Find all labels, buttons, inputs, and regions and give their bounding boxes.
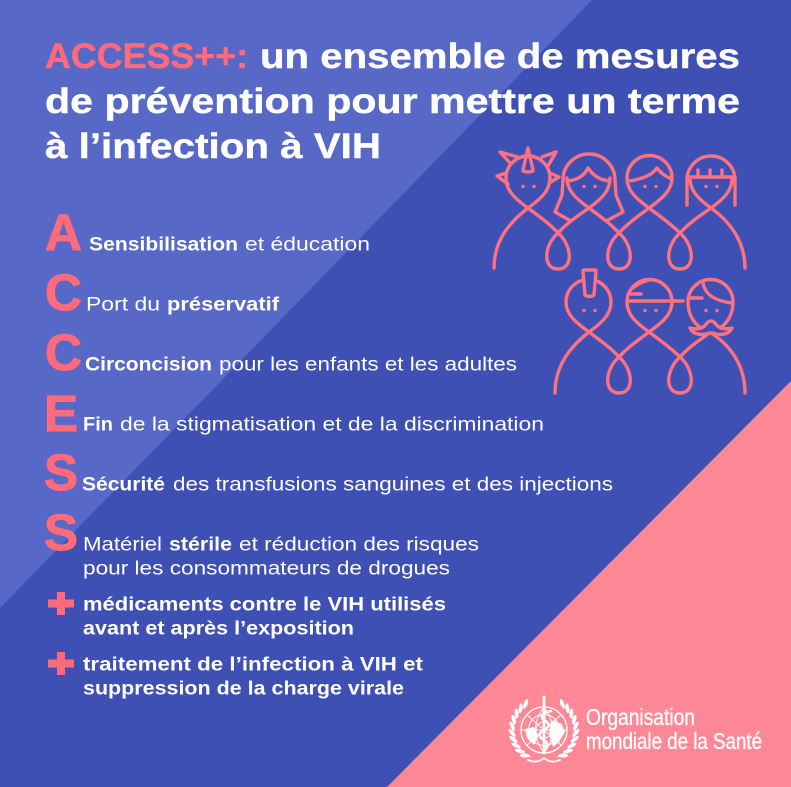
hair: mohawk bbox=[583, 270, 596, 296]
title: ACCESS++: bbox=[45, 37, 248, 76]
illustration: group of people, bottom row bbox=[555, 270, 745, 393]
hair: cap bbox=[627, 280, 683, 301]
list item: plus, medicines: médicaments contre le VIH utilisés bbox=[83, 594, 446, 616]
list item: plus, medicines: avant et après l’exposition bbox=[83, 618, 354, 640]
list item: S: et réduction des risques bbox=[239, 534, 479, 556]
title bbox=[45, 37, 740, 166]
list item: plus, treatment: traitement de l’infection à VIH et bbox=[83, 654, 424, 676]
faces bbox=[582, 309, 719, 312]
list item: S: Sécurité bbox=[82, 474, 165, 496]
list item: S: pour les consommateurs de drogues bbox=[83, 558, 450, 580]
list item: plus, medicines bbox=[48, 592, 446, 640]
illustration: group of people, top row bbox=[494, 148, 745, 269]
list item: C: pour les enfants et les adultes bbox=[219, 354, 517, 376]
list item: plus, treatment: suppression de la charge virale bbox=[83, 678, 404, 700]
list item: S: Matériel bbox=[83, 534, 162, 556]
list item: A: Sensibilisation bbox=[89, 234, 238, 256]
wreath bbox=[507, 698, 581, 758]
list item: A: et éducation bbox=[245, 234, 370, 256]
list item: plus, treatment bbox=[48, 652, 424, 700]
hair: short bbox=[629, 168, 672, 181]
list item: E: E bbox=[44, 385, 78, 442]
list item: S: des transfusions sanguines et des injections bbox=[173, 474, 613, 496]
list item: A: A bbox=[45, 204, 82, 261]
panel: pink corner bbox=[387, 381, 791, 787]
title: à l’infection à VIH bbox=[45, 127, 381, 166]
hair: spiky bbox=[497, 148, 559, 184]
list item: S bbox=[44, 504, 479, 580]
hair: side parting and moustache bbox=[688, 283, 732, 303]
title: de prévention pour mettre un terme bbox=[45, 82, 740, 121]
logo: WHO emblem bbox=[507, 697, 581, 762]
list item: C: C bbox=[45, 324, 82, 381]
list item: S: S bbox=[44, 504, 78, 561]
list item: C: Circoncision bbox=[85, 354, 212, 376]
hair: fringe bbox=[687, 156, 735, 205]
faces bbox=[521, 185, 719, 188]
list item: S: S bbox=[44, 444, 78, 501]
list item: S bbox=[44, 444, 613, 501]
logo: organisation name bbox=[586, 704, 762, 754]
hair: long bbox=[555, 154, 623, 220]
list item: C bbox=[45, 324, 517, 381]
logo: organisation name: Organisation bbox=[586, 704, 695, 730]
list item: C: préservatif bbox=[167, 294, 280, 316]
list item: S: stérile bbox=[169, 534, 232, 556]
list item: C: Port du bbox=[86, 294, 160, 316]
list item: E bbox=[44, 385, 544, 442]
list item: A bbox=[45, 204, 370, 261]
list item: C: C bbox=[45, 264, 82, 321]
title: un ensemble de mesures bbox=[260, 37, 740, 76]
list item: E: Fin bbox=[83, 414, 113, 436]
list item: C bbox=[45, 264, 280, 321]
list item: E: de la stigmatisation et de la discrimination bbox=[120, 414, 544, 436]
